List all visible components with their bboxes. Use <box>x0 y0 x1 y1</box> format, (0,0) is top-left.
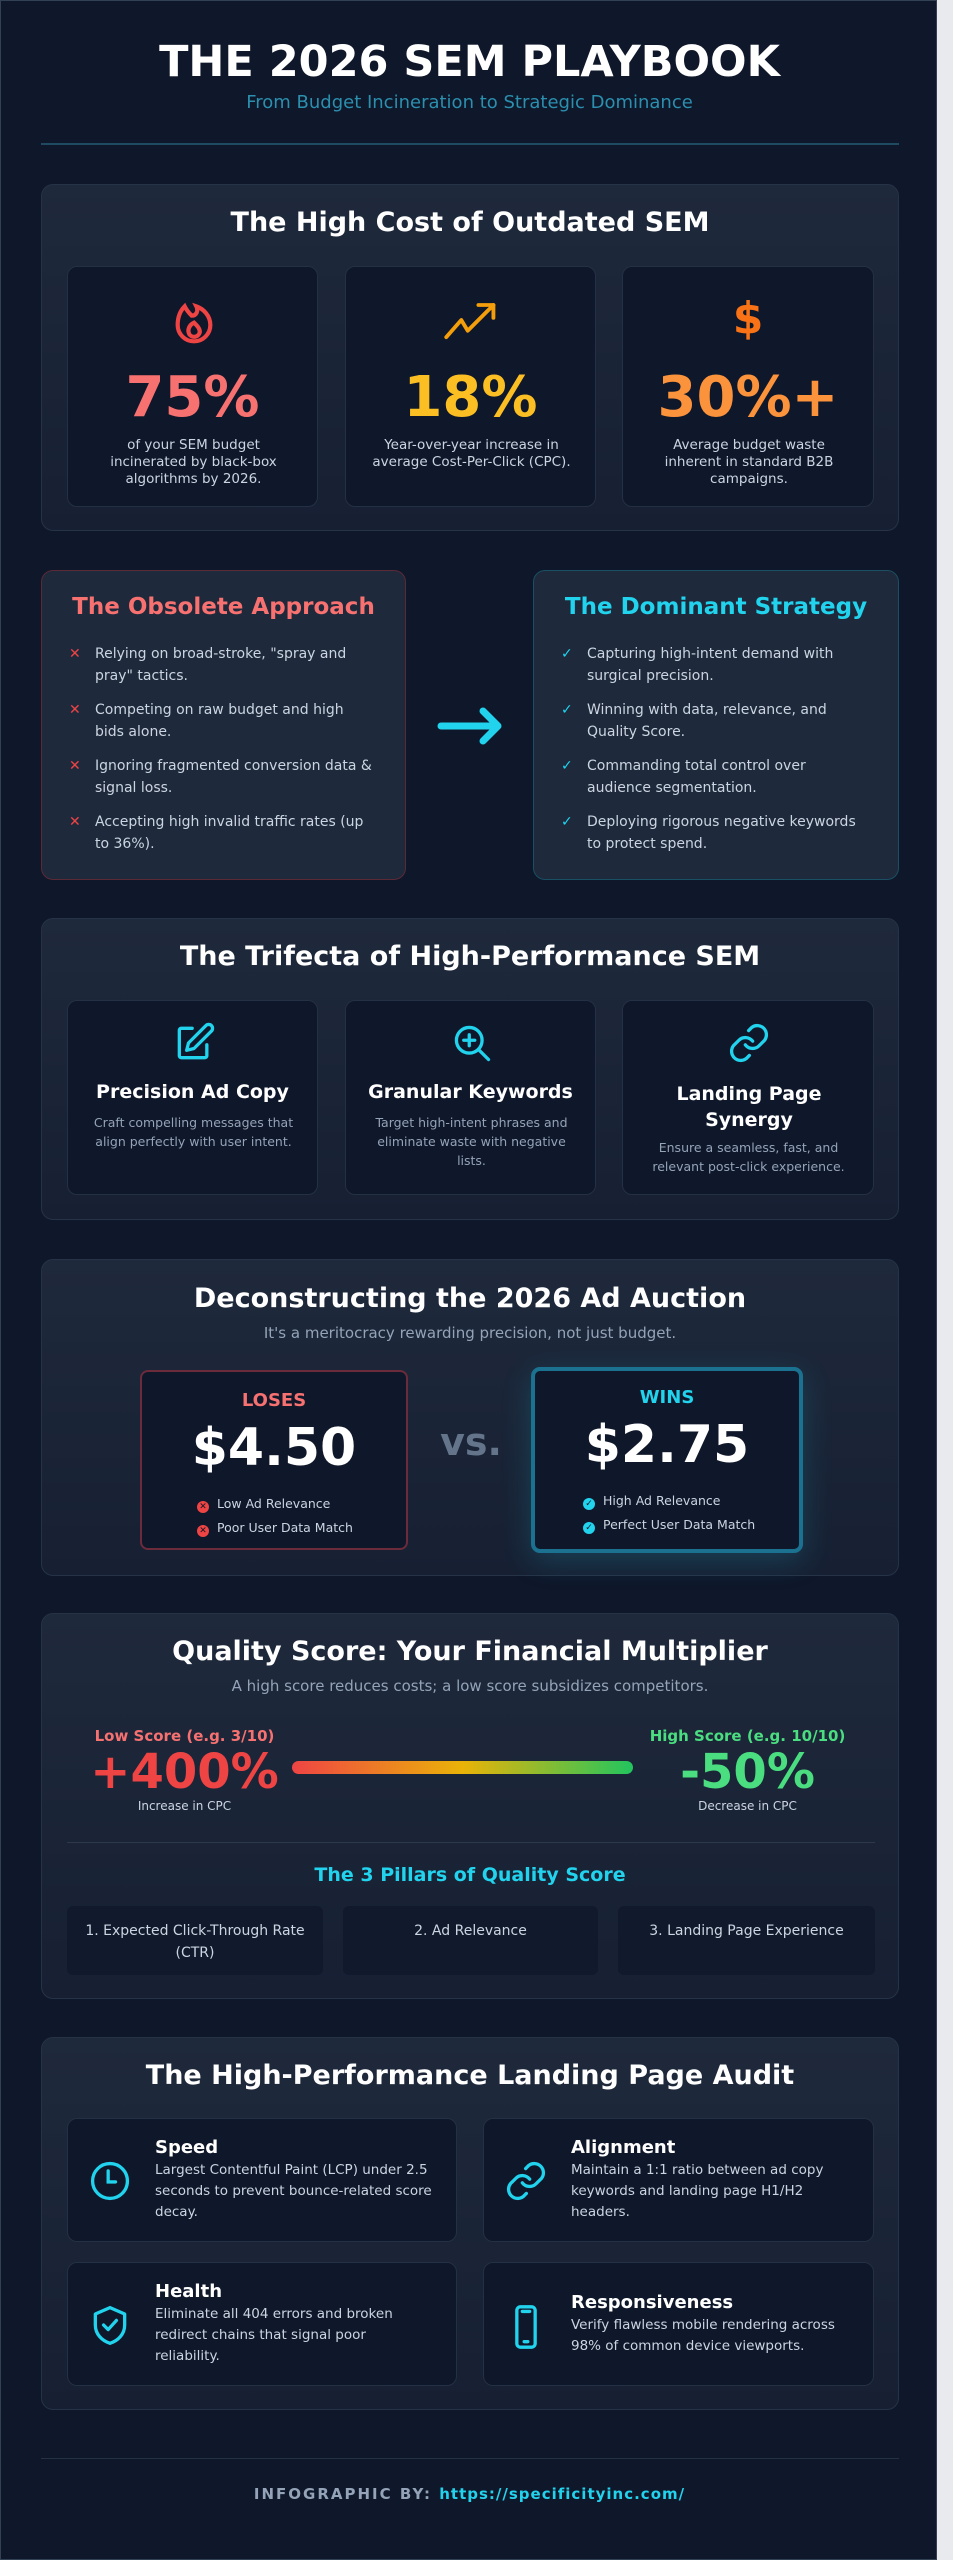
card: 18%: Year-over-year increase in average Cost-Per-Click (CPC). <box>372 437 571 470</box>
panel: landing page audit <box>41 2037 899 2410</box>
card: wins: ✓ <box>585 1499 593 1509</box>
card: speed <box>67 2118 457 2242</box>
heading: The High-Performance Landing Page Audit <box>146 2060 794 2091</box>
heading: The Obsolete Approach <box>72 594 375 620</box>
icon: trend up <box>444 303 496 340</box>
card: loses: LOSES <box>242 1390 306 1411</box>
card: 18%: 18% <box>403 365 538 430</box>
card: responsiveness <box>483 2262 874 2386</box>
card: 18% <box>345 266 596 507</box>
list: ✕ <box>69 702 81 718</box>
card: landing page synergy: Ensure a seamless, fast, and relevant post-click experience. <box>652 1140 845 1174</box>
card: health: Eliminate all 404 errors and broken redirect chains that signal poor reliability. <box>155 2306 393 2364</box>
list: ✓ <box>561 814 573 830</box>
card: precision ad copy: Precision Ad Copy <box>96 1081 289 1103</box>
high score stat: -50% <box>680 1744 815 1800</box>
card: loses: Poor User Data Match <box>217 1520 353 1535</box>
low score stat: Increase in CPC <box>138 1799 231 1813</box>
card: 30%: Average budget waste inherent in standard B2B campaigns. <box>665 437 833 487</box>
icon: link <box>730 1024 768 1062</box>
card: loses: Low Ad Relevance <box>217 1496 330 1511</box>
card: wins: High Ad Relevance <box>603 1493 720 1508</box>
list: Accepting high invalid traffic rates (up to 36%). <box>95 814 363 852</box>
icon: pencil <box>178 1022 214 1060</box>
card: wins: ✓ <box>585 1523 593 1533</box>
card: wins: WINS <box>640 1387 694 1408</box>
subtitle: It's a meritocracy rewarding precision, not just budget. <box>264 1324 676 1342</box>
high score stat: High Score (e.g. 10/10) <box>650 1727 845 1745</box>
panel: high cost <box>41 184 899 531</box>
list: Winning with data, relevance, and Quality Score. <box>587 702 827 740</box>
subtitle: A high score reduces costs; a low score subsidizes competitors. <box>232 1677 708 1695</box>
list: Relying on broad-stroke, "spray and pray" tactics. <box>95 646 346 684</box>
pillars: 2. Ad Relevance <box>414 1923 527 1939</box>
low score stat: +400% <box>90 1744 279 1800</box>
panel: obsolete approach <box>41 570 406 880</box>
card: landing page synergy <box>622 1000 874 1195</box>
icon: clock <box>90 2162 130 2200</box>
card: speed: Largest Contentful Paint (LCP) under 2.5 seconds to prevent bounce-related score decay. <box>155 2162 432 2220</box>
low score stat: Low Score (e.g. 3/10) <box>95 1727 274 1745</box>
panel: quality score <box>41 1613 899 1999</box>
card: 75%: of your SEM budget incinerated by black-box algorithms by 2026. <box>110 437 277 487</box>
high score stat: Decrease in CPC <box>698 1799 797 1813</box>
subtitle: From Budget Incineration to Strategic Dominance <box>246 92 693 113</box>
list <box>69 646 372 852</box>
card: 30%: 30%+ <box>658 365 838 430</box>
pillars <box>67 1906 875 1975</box>
heading: The Trifecta of High-Performance SEM <box>180 941 760 972</box>
card: alignment: Maintain a 1:1 ratio between ad copy keywords and landing page H1/H2 headers. <box>571 2162 823 2220</box>
list: Competing on raw budget and high bids alone. <box>95 702 344 740</box>
heading: The High Cost of Outdated SEM <box>231 207 709 238</box>
card: speed: Speed <box>155 2137 218 2158</box>
high score stat <box>650 1727 845 1813</box>
list: ✓ <box>561 758 573 774</box>
pillars heading: The 3 Pillars of Quality Score <box>314 1864 626 1886</box>
pillars: 3. Landing Page Experience <box>649 1923 844 1939</box>
footer credit: INFOGRAPHIC BY: https://specificityinc.com/ <box>254 2485 685 2503</box>
panel: trifecta <box>41 918 899 1220</box>
list: ✓ <box>561 646 573 662</box>
list <box>561 646 856 852</box>
card: granular keywords <box>345 1000 596 1195</box>
gradient bar <box>292 1761 633 1774</box>
card: alignment: Alignment <box>571 2137 675 2158</box>
card: responsiveness: Verify flawless mobile rendering across 98% of common device viewports. <box>571 2317 835 2354</box>
card: precision ad copy: Craft compelling messages that align perfectly with user intent. <box>94 1115 293 1149</box>
card: loses: ✕ <box>199 1502 207 1512</box>
card: 30% <box>622 266 874 507</box>
list: Capturing high-intent demand with surgical precision. <box>587 646 833 684</box>
title: THE 2026 SEM PLAYBOOK <box>159 37 780 87</box>
card: wins <box>531 1367 803 1553</box>
list: ✕ <box>69 814 81 830</box>
icon: dollar: $ <box>733 293 763 344</box>
icon: flame <box>176 302 212 344</box>
card: responsiveness: Responsiveness <box>571 2292 733 2313</box>
list: Deploying rigorous negative keywords to protect spend. <box>587 814 856 852</box>
icon: link <box>506 2162 546 2200</box>
panel: ad auction <box>41 1259 899 1576</box>
card: loses: ✕ <box>199 1526 207 1536</box>
arrow <box>438 708 502 744</box>
card: alignment <box>483 2118 874 2242</box>
card: 75%: 75% <box>125 365 260 430</box>
heading: The Dominant Strategy <box>565 594 867 620</box>
card: loses <box>140 1370 408 1550</box>
heading: Deconstructing the 2026 Ad Auction <box>194 1283 746 1314</box>
vs label: vs. <box>440 1420 502 1464</box>
card: 75% <box>67 266 318 507</box>
card: wins: Perfect User Data Match <box>603 1517 755 1532</box>
icon: shield check <box>94 2306 126 2345</box>
list: Commanding total control over audience segmentation. <box>587 758 806 796</box>
card: loses: $4.50 <box>192 1418 356 1478</box>
list: Ignoring fragmented conversion data & signal loss. <box>95 758 372 796</box>
card: health: Health <box>155 2281 222 2302</box>
heading: Quality Score: Your Financial Multiplier <box>172 1636 768 1667</box>
pillars: 1. Expected Click-Through Rate (CTR) <box>85 1923 305 1961</box>
card: health <box>67 2262 457 2386</box>
card: wins: $2.75 <box>585 1415 749 1475</box>
card: granular keywords: Target high-intent phrases and eliminate waste with negative lists. <box>375 1115 568 1168</box>
card: precision ad copy <box>67 1000 318 1195</box>
panel: dominant strategy <box>533 570 899 880</box>
icon: zoom plus <box>454 1026 490 1062</box>
list: ✕ <box>69 758 81 774</box>
list: ✓ <box>561 702 573 718</box>
card: granular keywords: Granular Keywords <box>368 1081 573 1103</box>
card: landing page synergy: Landing Page Synergy <box>676 1083 822 1131</box>
list: ✕ <box>69 646 81 662</box>
icon: phone <box>515 2305 537 2349</box>
low score stat <box>90 1727 279 1813</box>
